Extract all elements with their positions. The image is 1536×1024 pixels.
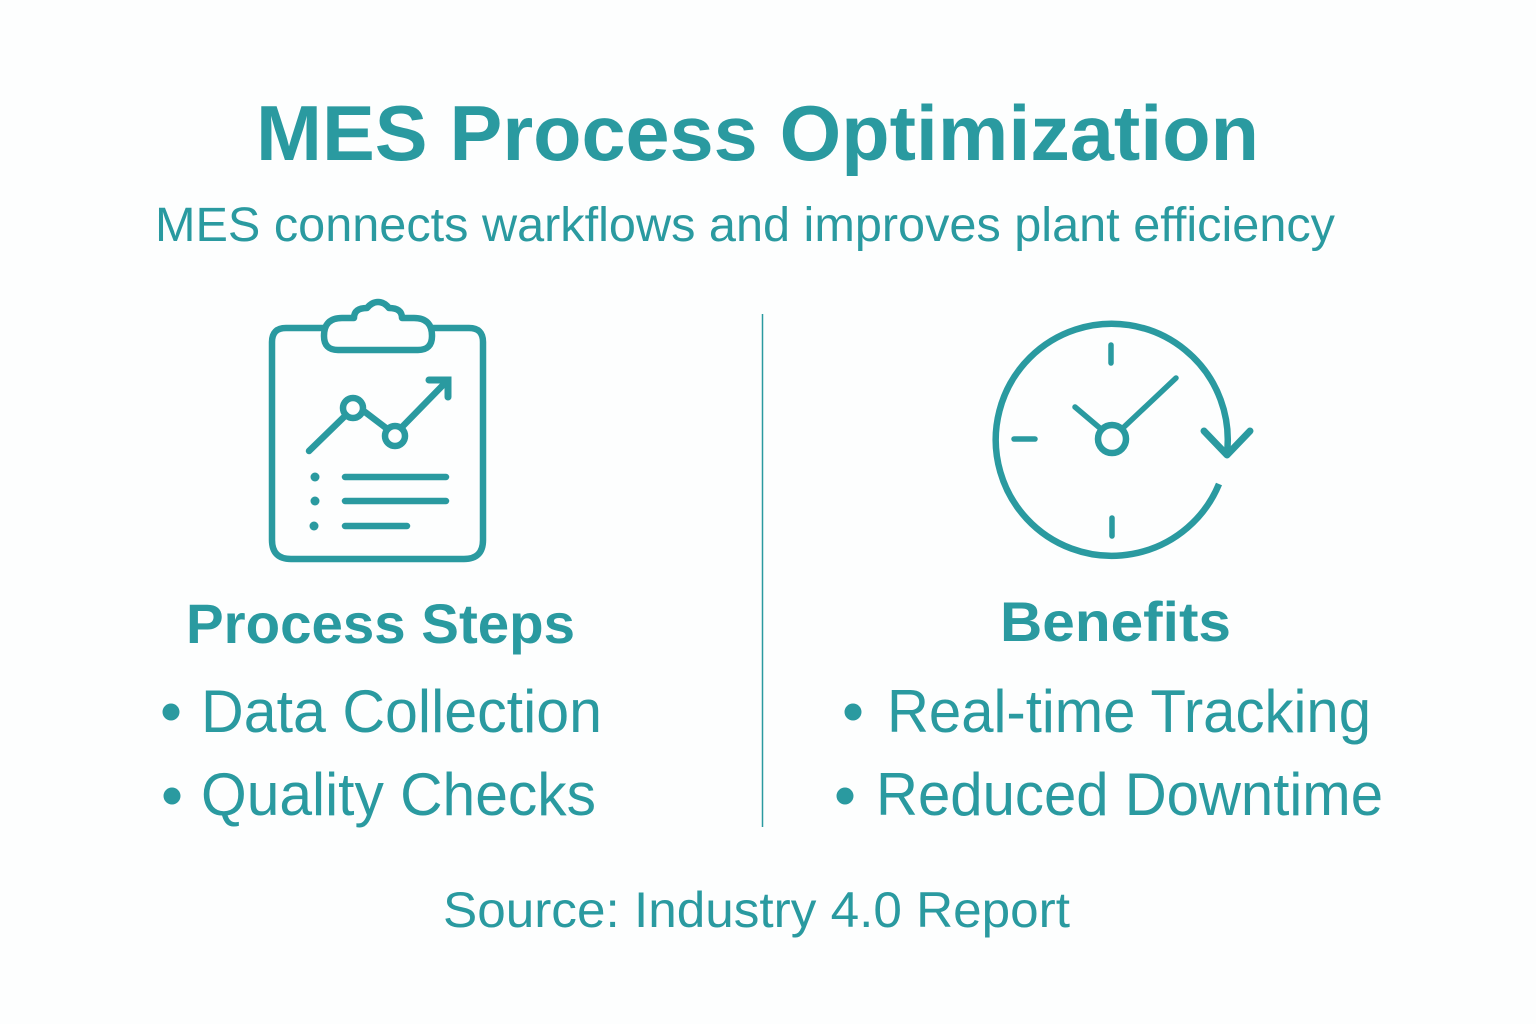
bullet item: data collection: Data Collection bbox=[201, 678, 602, 745]
source note: Source: Industry 4.0 Report bbox=[443, 882, 1070, 938]
icon: clock with circular arrow bbox=[996, 324, 1250, 556]
panel: benefits bbox=[836, 590, 1383, 828]
icon: clipboard with chart bbox=[272, 302, 483, 559]
divider bbox=[762, 314, 764, 827]
heading: benefits: Benefits bbox=[1000, 590, 1231, 653]
panel: process steps bbox=[162, 592, 602, 828]
heading: process steps: Process Steps bbox=[186, 592, 575, 655]
subtitle: MES connects warkflows and improves plant efficiency bbox=[155, 199, 1335, 252]
bullet item: quality checks: Quality Checks bbox=[201, 761, 596, 828]
bullet item: real-time tracking: Real-time Tracking bbox=[887, 678, 1371, 745]
title: MES Process Optimization bbox=[256, 89, 1259, 177]
bullet item: reduced downtime: Reduced Downtime bbox=[876, 761, 1383, 828]
